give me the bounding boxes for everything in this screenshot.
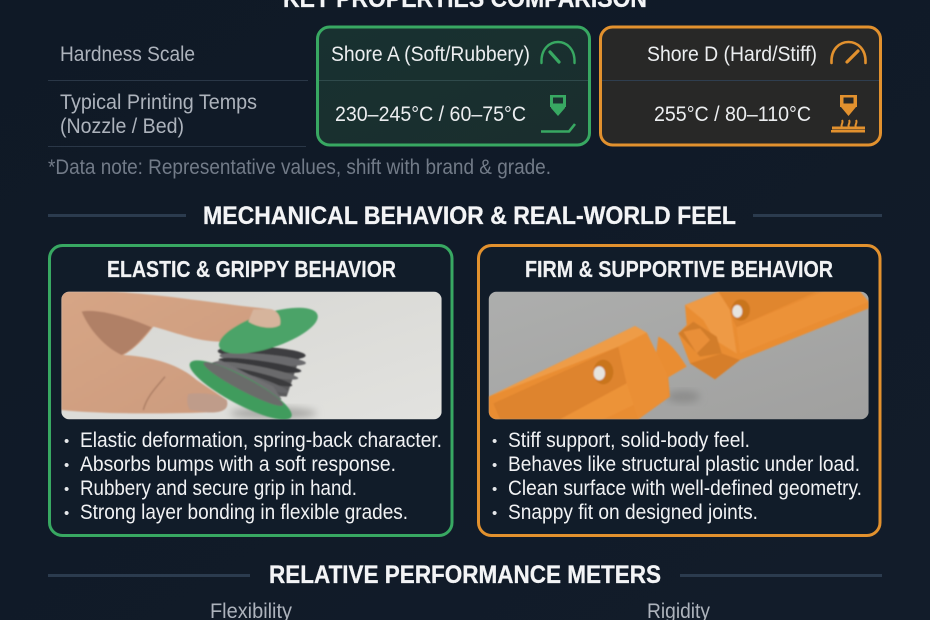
photo: orange rigid printed snap-fit parts bbox=[489, 292, 869, 419]
panel: Shore D column bbox=[600, 27, 880, 145]
icon: nozzle and heated bed bbox=[831, 95, 865, 132]
Shore D value: Shore D (Hard/Stiff) bbox=[647, 43, 817, 66]
bullet list: elastic: • bbox=[64, 505, 69, 522]
row label: printing temps bbox=[60, 91, 257, 138]
bullet list: elastic bbox=[64, 429, 442, 524]
panel: firm and supportive behavior bbox=[478, 246, 880, 536]
row label: printing temps: Typical Printing Temps bbox=[60, 91, 257, 114]
bullet list: firm: Behaves like structural plastic under load. bbox=[508, 453, 860, 476]
icon: hard gauge bbox=[831, 42, 866, 63]
Shore D temperatures: 255°C / 80–110°C bbox=[654, 103, 811, 126]
section heading: mechanical behavior: MECHANICAL BEHAVIOR & REAL-WORLD FEEL bbox=[203, 202, 736, 230]
Shore A temperatures: 230–245°C / 60–75°C bbox=[335, 103, 526, 126]
row label: hardness scale: Hardness Scale bbox=[60, 43, 195, 66]
bullet list: elastic: Strong layer bonding in flexible grades. bbox=[80, 501, 408, 524]
Shore A value: Shore A (Soft/Rubbery) bbox=[331, 43, 530, 66]
section heading: relative performance meters: RELATIVE PERFORMANCE METERS bbox=[269, 561, 661, 589]
icon: nozzle and bed bbox=[541, 95, 575, 132]
bullet list: firm bbox=[492, 429, 862, 524]
icon: soft gauge bbox=[541, 42, 575, 63]
comparison table bbox=[48, 27, 880, 146]
bullet list: elastic: • bbox=[64, 457, 69, 474]
bullet list: elastic: Rubbery and secure grip in hand. bbox=[80, 477, 357, 500]
panel title: firm: FIRM & SUPPORTIVE BEHAVIOR bbox=[525, 256, 833, 282]
bullet list: elastic: Absorbs bumps with a soft response. bbox=[80, 453, 396, 476]
bullet list: elastic: • bbox=[64, 433, 69, 450]
row label: printing temps: (Nozzle / Bed) bbox=[60, 115, 184, 138]
data note: *Data note: Representative values, shift with brand & grade. bbox=[48, 156, 551, 179]
bullet list: firm: • bbox=[492, 433, 497, 450]
panel: elastic and grippy behavior bbox=[50, 246, 452, 536]
bullet list: firm: Stiff support, solid-body feel. bbox=[508, 429, 750, 452]
photo: hand squeezing green flexible bellows bbox=[61, 292, 442, 429]
bullet list: firm: • bbox=[492, 505, 497, 522]
bullet list: firm: Clean surface with well-defined geometry. bbox=[508, 477, 862, 500]
bullet list: elastic: Elastic deformation, spring-back character. bbox=[80, 429, 442, 452]
panel: Shore A column bbox=[318, 27, 590, 145]
bullet list: elastic: • bbox=[64, 481, 69, 498]
bullet list: firm: • bbox=[492, 457, 497, 474]
panel title: elastic: ELASTIC & GRIPPY BEHAVIOR bbox=[107, 256, 396, 282]
bullet list: firm: • bbox=[492, 481, 497, 498]
bullet list: firm: Snappy fit on designed joints. bbox=[508, 501, 758, 524]
